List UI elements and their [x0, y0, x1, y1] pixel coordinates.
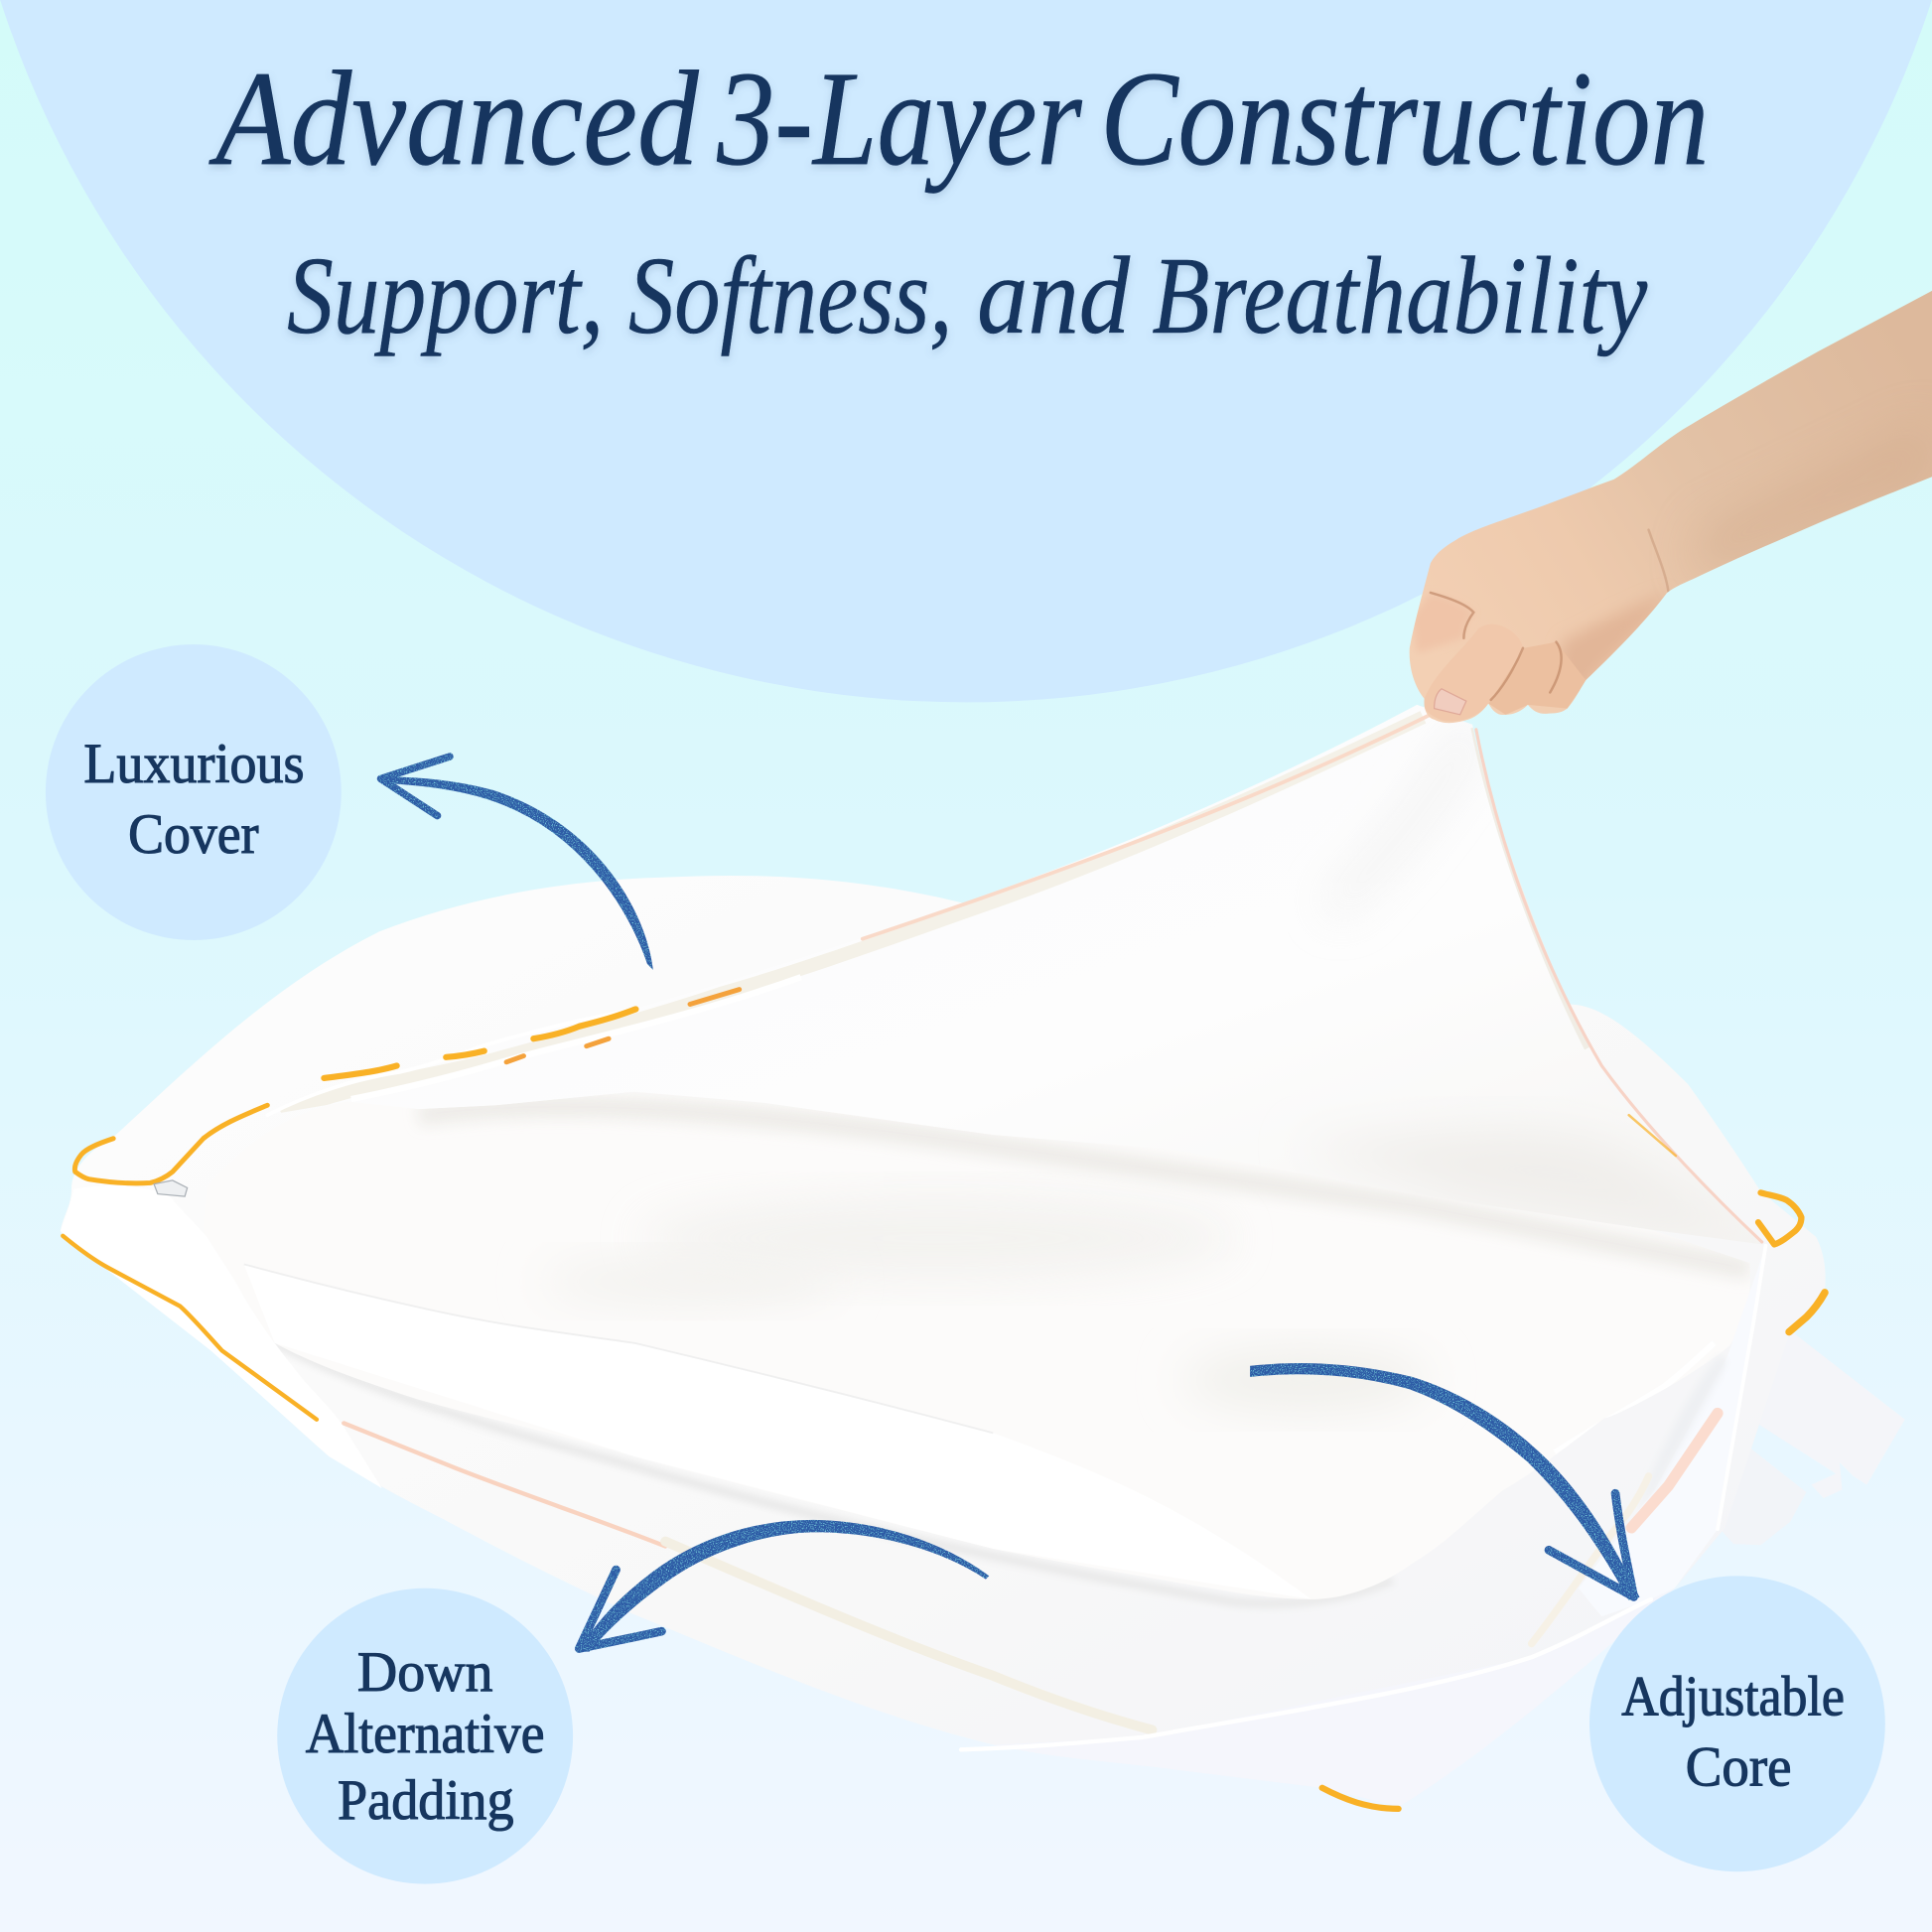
subtitle: Softness,: [628, 234, 952, 357]
arrow: to Luxurious Cover: [380, 757, 652, 967]
label bubble: Adjustable Core: Core: [1686, 1735, 1792, 1798]
hand: thumb nail: [1435, 689, 1466, 715]
pillow: front right band: [1579, 1246, 1765, 1616]
title: Construction: [1100, 43, 1709, 194]
header semicircle: [0, 0, 1932, 702]
title: [208, 43, 1709, 194]
hand: forearm lower shade: [1714, 478, 1897, 562]
label bubble: Adjustable Core: Adjustable: [1621, 1666, 1845, 1728]
subtitle: [287, 234, 1648, 357]
pillow: front left fold: [61, 1185, 382, 1488]
label bubble: Down Alternative Padding: Padding: [338, 1769, 514, 1832]
hand: creases: [1431, 530, 1668, 700]
arrow: to Adjustable Core: [1251, 1364, 1639, 1599]
pillow: back cover: [61, 876, 1826, 1806]
hand: thumb: [1424, 652, 1490, 721]
hand: fingers: [1488, 642, 1586, 715]
title: 3-Layer: [716, 43, 1082, 194]
pillow illustration: [61, 705, 1905, 1809]
hand holding the cover: [1410, 291, 1932, 723]
subtitle: Support,: [287, 234, 604, 357]
arrow: to Down Alternative Padding: [579, 1520, 988, 1651]
pillow: shadow under core: [275, 1343, 1392, 1603]
title: Advanced: [208, 43, 699, 194]
pillow: right inner shade: [1639, 1355, 1727, 1509]
pillow: zipper pull: [154, 1180, 188, 1196]
pillow: core: [204, 1092, 1750, 1599]
label bubble: Down Alternative Padding: Alternative: [306, 1703, 545, 1765]
pillow: bottom lip: [993, 1588, 1675, 1806]
label bubble: Luxurious Cover: Luxurious: [83, 733, 305, 795]
pillow: seam lines: [267, 712, 1765, 1749]
subtitle: and: [977, 234, 1131, 357]
label bubble: Luxurious Cover: [46, 644, 342, 940]
label bubble: Down Alternative Padding: Down: [357, 1641, 492, 1704]
subtitle: Breathability: [1152, 234, 1648, 357]
hand: finger web shadow: [1413, 598, 1468, 649]
label bubble: Down Alternative Padding: [277, 1588, 573, 1884]
label bubble: Luxurious Cover: Cover: [128, 803, 259, 866]
pillow: upper strap: [1747, 1333, 1905, 1498]
hand: palm shadow: [1560, 593, 1667, 692]
pillow: gold piping: [63, 990, 1825, 1809]
label bubble: Adjustable Core: [1589, 1576, 1885, 1871]
pillow: flap: [267, 705, 1763, 1244]
pillow: lower strap: [1719, 1443, 1806, 1545]
